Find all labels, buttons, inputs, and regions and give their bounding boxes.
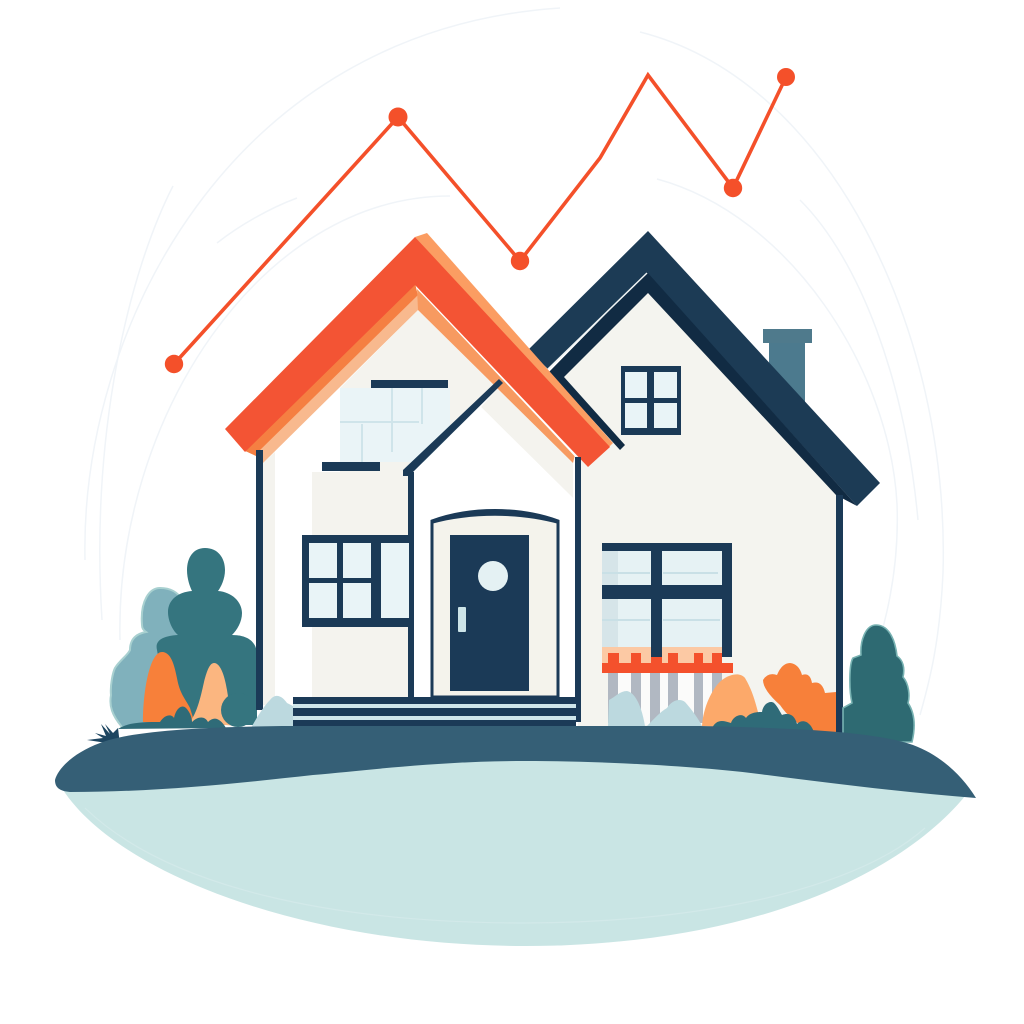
price line chart bbox=[165, 68, 795, 373]
bushes right bbox=[608, 625, 914, 742]
porch steps bbox=[293, 697, 576, 726]
pale rocks bbox=[608, 691, 645, 726]
teal shrub bbox=[157, 548, 257, 725]
light orange shrub bbox=[190, 663, 237, 726]
right tree bbox=[843, 625, 914, 742]
light orange shrub bbox=[702, 674, 760, 728]
back pale bush bbox=[110, 588, 195, 727]
teal bumps bbox=[711, 702, 815, 736]
left post bbox=[256, 450, 263, 710]
door surround bbox=[431, 510, 559, 697]
ground: pale water ellipse bbox=[60, 750, 970, 946]
foreground bumps bbox=[118, 706, 226, 729]
grass tuft bbox=[87, 724, 120, 745]
orange roof bbox=[225, 233, 613, 467]
ground: dark hill bbox=[55, 726, 976, 798]
house: right wing wall bbox=[540, 285, 838, 735]
dark rounded shrub bbox=[221, 693, 255, 727]
house: left wing wall bbox=[262, 305, 578, 726]
porch gable bbox=[403, 379, 581, 722]
left window bbox=[302, 535, 414, 627]
door bbox=[450, 535, 529, 691]
orange shrub bbox=[143, 652, 195, 724]
orange shrub bbox=[763, 663, 836, 735]
chimney bbox=[763, 329, 812, 402]
faint upper window bbox=[322, 380, 450, 471]
right attic window bbox=[621, 366, 681, 435]
dark roof bbox=[528, 231, 880, 506]
balcony railing bbox=[602, 647, 733, 725]
right window bbox=[602, 543, 732, 657]
right wall post bbox=[836, 495, 843, 735]
bushes left bbox=[87, 548, 257, 745]
pale rock by steps bbox=[251, 696, 293, 728]
